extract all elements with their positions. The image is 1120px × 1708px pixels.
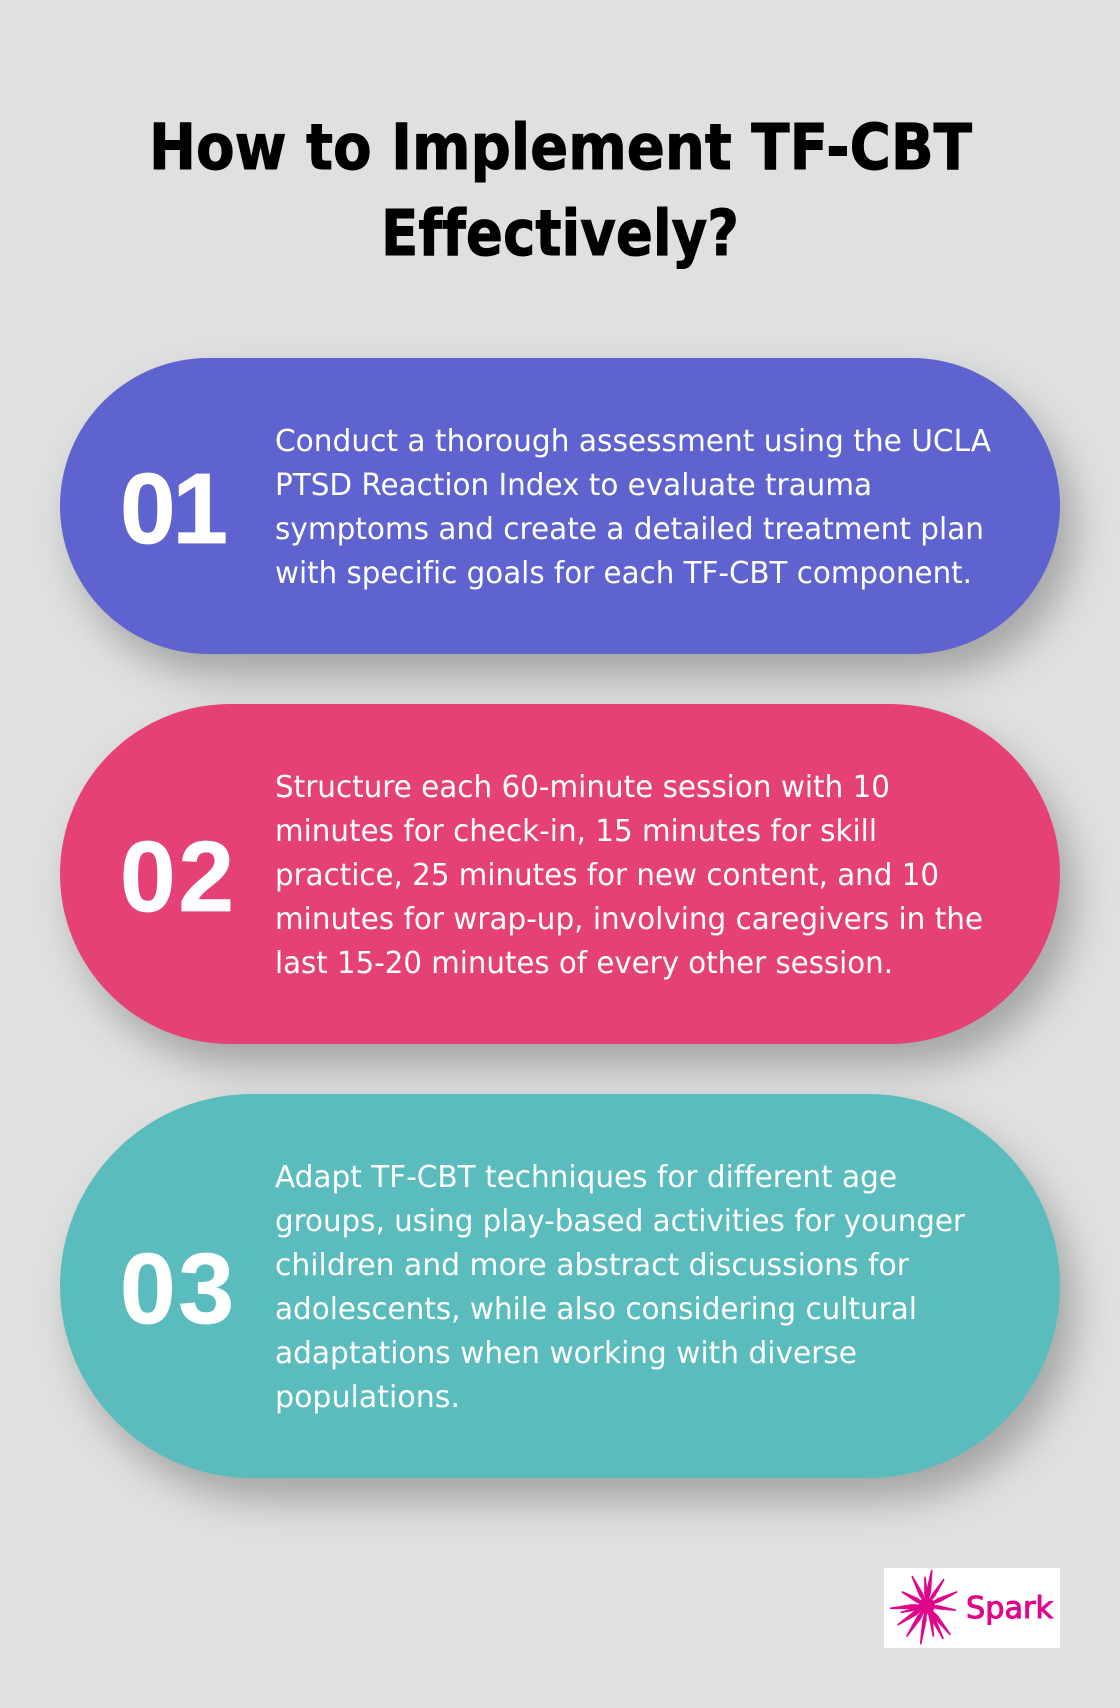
logo: Spark	[884, 1568, 1060, 1648]
step 03 text	[275, 1160, 965, 1415]
panel: step 03	[60, 1094, 1074, 1500]
wordmark: Spark	[966, 1591, 1054, 1626]
step 03 text: adolescents, while also considering cultural	[275, 1292, 917, 1327]
step 03 text: groups, using play-based activities for younger	[275, 1204, 965, 1239]
title	[149, 111, 972, 270]
step 03 text: Adapt TF-CBT techniques for different age	[275, 1160, 897, 1195]
panel: step 01	[60, 358, 1074, 676]
step 01 text: symptoms and create a detailed treatment plan	[275, 512, 984, 547]
step 02 text: minutes for wrap-up, involving caregivers in the	[275, 902, 983, 937]
step 02 text: minutes for check-in, 15 minutes for skill	[275, 814, 877, 849]
step 02 text: practice, 25 minutes for new content, and 10	[275, 858, 939, 893]
step 01 text: Conduct a thorough assessment using the UCLA	[275, 424, 991, 459]
title: Effectively?	[381, 197, 739, 270]
step 01 text	[275, 424, 991, 591]
title: How to Implement TF-CBT	[149, 111, 972, 184]
panel: step 02	[60, 704, 1074, 1066]
step 03 text: adaptations when working with diverse	[275, 1336, 857, 1371]
step number 03: 03	[120, 1233, 234, 1345]
step 02 text: Structure each 60-minute session with 10	[275, 770, 890, 805]
icon: spark starburst	[891, 1571, 957, 1644]
step 01 text: PTSD Reaction Index to evaluate trauma	[275, 468, 872, 503]
step 02 text	[275, 770, 983, 981]
step number 02: 02	[120, 821, 234, 933]
step 03 text: children and more abstract discussions for	[275, 1248, 909, 1283]
step number 01: 01	[120, 453, 228, 565]
step 02 text: last 15-20 minutes of every other session.	[275, 946, 893, 981]
step 03 text: populations.	[275, 1380, 460, 1415]
step 01 text: with specific goals for each TF-CBT component.	[275, 556, 972, 591]
